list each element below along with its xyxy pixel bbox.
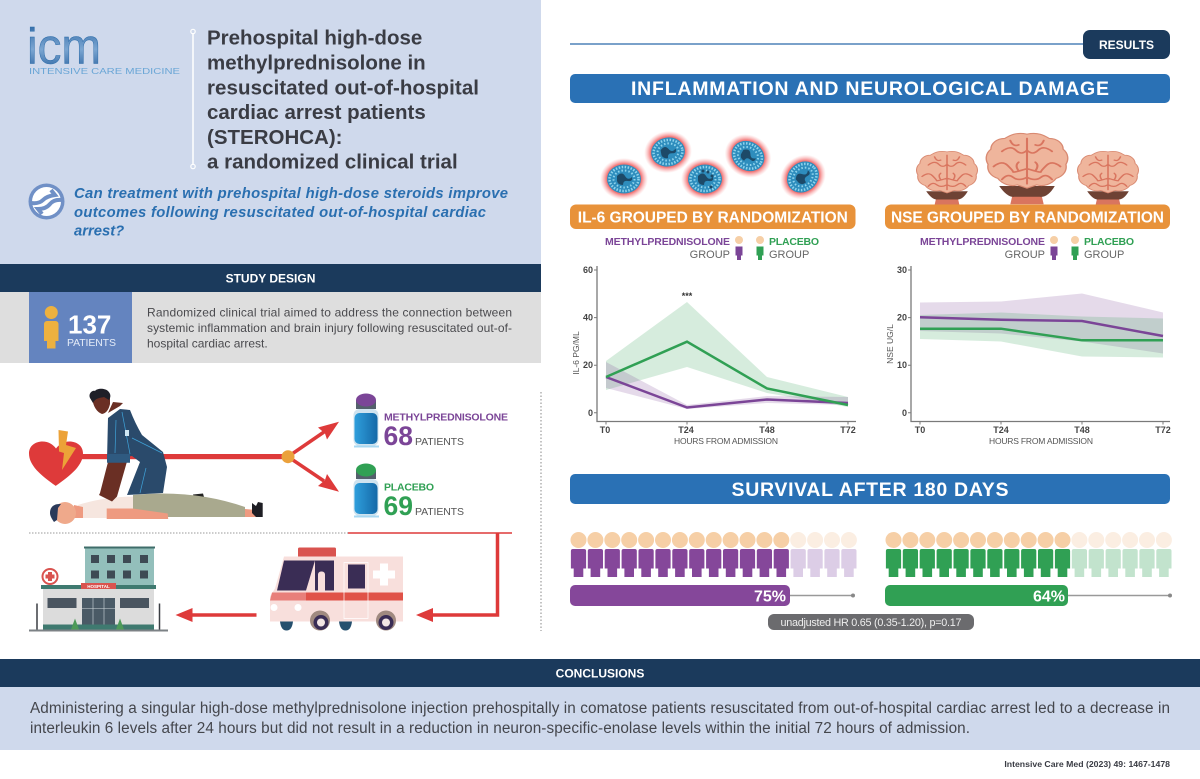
label: placebo 69 patients: PATIENTS — [415, 506, 464, 518]
logo: ICM Intensive Care Medicine: INTENSIVE CARE MEDICINE — [29, 66, 180, 76]
label: methylprednisolone 68 patients: 68 — [384, 421, 413, 451]
title — [207, 26, 479, 174]
legend: NSE chart: PLACEBO — [1084, 236, 1134, 248]
hazard ratio pill: unadjusted HR 0.65 (0.35-1.20), p=0.17 — [780, 617, 962, 629]
title: cardiac arrest patients — [207, 101, 426, 124]
label: placebo 69 patients: 69 — [384, 491, 413, 521]
heading: study design: STUDY DESIGN — [226, 272, 315, 286]
pictogram: methylprednisolone survivors — [570, 532, 857, 577]
icon: question arrows — [28, 184, 64, 220]
heading: study design — [0, 264, 541, 292]
pathway arrows — [80, 422, 339, 492]
panel: conclusions text: Administering a singular high-dose methylprednisolone injection prehospitally in comatose patients resuscitated from out-of-hospital cardiac arrest led to a decrease in — [30, 700, 1170, 717]
title: a randomized clinical trial — [207, 151, 458, 174]
icon: patient — [44, 306, 58, 348]
illustration: hospital — [29, 546, 168, 632]
chart: IL-6 line chart — [571, 265, 856, 446]
chart: NSE line chart: T48 — [1074, 425, 1090, 435]
illustration: patient lying down — [50, 494, 263, 524]
chart: NSE line chart: 20 — [897, 312, 907, 322]
bar: placebo 64% — [885, 585, 1172, 606]
legend: NSE chart: GROUP — [1005, 249, 1045, 261]
chart: IL-6 line chart: IL-6 PG/ML — [571, 331, 581, 375]
chart: IL-6 line chart: *** — [682, 291, 693, 301]
panel: study design: Randomized clinical trial aimed to address the connection between — [147, 306, 512, 320]
bar: methylprednisolone 75% — [570, 585, 855, 606]
panel: study design: PATIENTS — [67, 337, 116, 349]
research question: outcomes following resuscitated out-of-hospital cardiac — [74, 205, 487, 221]
citation: Intensive Care Med (2023) 49: 1467-1478 — [1004, 759, 1170, 769]
label: methylprednisolone 68 patients: METHYLPREDNISOLONE — [384, 412, 508, 424]
chart: NSE line chart: T0 — [915, 425, 925, 435]
results rule and badge — [570, 30, 1170, 59]
label: methylprednisolone 68 patients — [384, 412, 508, 451]
icon: placebo vial — [354, 464, 379, 516]
label: methylprednisolone 68 patients: PATIENTS — [415, 436, 464, 448]
panel: study design: 137 — [68, 310, 111, 340]
heading: inflammation and neurological damage — [570, 74, 1170, 103]
research question — [74, 186, 508, 240]
arrow: to hospital — [176, 608, 256, 622]
chart: IL-6 line chart: T0 — [600, 425, 610, 435]
label: placebo 69 patients — [384, 482, 464, 521]
title: Prehospital high-dose — [207, 26, 422, 50]
panel: study design — [0, 292, 541, 363]
label: placebo 69 patients: PLACEBO — [384, 482, 434, 494]
icons: inflamed cells — [600, 126, 835, 209]
chart: IL-6 line chart: T48 — [759, 425, 775, 435]
node: randomization — [282, 450, 294, 463]
chart: IL-6 line chart: 0 — [588, 408, 593, 418]
legend: IL-6 chart: METHYLPREDNISOLONE — [605, 236, 730, 248]
illustration: rescuer doing CPR — [90, 389, 167, 502]
title: resuscitated out-of-hospital — [207, 76, 479, 99]
bar: placebo 64%: 64% — [1033, 588, 1065, 606]
chart: NSE line chart: 0 — [902, 408, 907, 418]
arrow: to ambulance — [348, 533, 512, 622]
title divider — [191, 29, 195, 169]
heading: conclusions — [0, 659, 1200, 687]
legend: IL-6 chart: GROUP — [769, 249, 809, 261]
panel: study design: hospital cardiac arrest. — [147, 336, 268, 350]
icons: brains — [917, 133, 1138, 205]
logo: ICM Intensive Care Medicine: icm — [27, 18, 101, 74]
chart: NSE line chart: T24 — [993, 425, 1009, 435]
research question: arrest? — [74, 224, 124, 240]
chart: IL-6 line chart: 40 — [583, 312, 593, 322]
chart: NSE line chart: T72 — [1155, 425, 1171, 435]
legend: NSE chart — [920, 236, 1134, 261]
chart: IL-6 line chart: T24 — [678, 425, 694, 435]
logo: ICM Intensive Care Medicine — [27, 18, 180, 76]
heading: inflammation and neurological damage: INFLAMMATION AND NEUROLOGICAL DAMAGE — [631, 78, 1109, 100]
research question: Can treatment with prehospital high-dose steroids improve — [74, 186, 508, 202]
legend: IL-6 chart: PLACEBO — [769, 236, 819, 248]
chart: NSE line chart: 30 — [897, 265, 907, 275]
chart: NSE line chart: HOURS FROM ADMISSION — [989, 436, 1093, 446]
panel: header background — [0, 0, 541, 264]
panel: conclusions text — [0, 687, 1200, 750]
chart: NSE line chart — [885, 265, 1171, 446]
title: methylprednisolone in — [207, 52, 426, 74]
heading: conclusions: CONCLUSIONS — [556, 666, 644, 680]
chart: IL-6 line chart: 20 — [583, 360, 593, 370]
panel: study design: systemic inflammation and brain injury following resuscitated out-of- — [147, 321, 512, 335]
legend: IL-6 chart — [605, 236, 819, 261]
heading: survival after 180 days: SURVIVAL AFTER 180 DAYS — [732, 479, 1008, 501]
panel: conclusions text: interleukin 6 levels after 24 hours but did not result in a reduction in neuron-specific-enolase levels within the initial 72 hours of admission. — [30, 720, 970, 737]
heading: IL-6 — [570, 204, 856, 229]
legend: NSE chart: METHYLPREDNISOLONE — [920, 236, 1045, 248]
heading: survival after 180 days — [570, 474, 1170, 504]
hazard ratio pill — [768, 614, 974, 630]
results rule and badge: RESULTS — [1099, 38, 1154, 52]
chart: IL-6 line chart: T72 — [840, 425, 856, 435]
legend: IL-6 chart: GROUP — [690, 249, 730, 261]
title: (STEROHCA): — [207, 126, 343, 149]
chart: IL-6 line chart: 60 — [583, 265, 593, 275]
heading: NSE: NSE GROUPED BY RANDOMIZATION — [891, 210, 1164, 226]
heading: IL-6: IL-6 GROUPED BY RANDOMIZATION — [578, 210, 848, 226]
bar: methylprednisolone 75%: 75% — [754, 588, 786, 606]
legend: NSE chart: GROUP — [1084, 249, 1124, 261]
chart: NSE line chart: NSE UG/L — [885, 324, 895, 364]
pictogram: placebo survivors — [886, 532, 1172, 577]
chart: NSE line chart: 10 — [897, 360, 907, 370]
icon: methylprednisolone vial — [354, 394, 379, 446]
chart: IL-6 line chart: HOURS FROM ADMISSION — [674, 436, 778, 446]
icon: heart with bolt — [29, 430, 83, 486]
illustration: ambulance — [270, 548, 403, 630]
heading: NSE — [885, 204, 1170, 229]
illustration: hospital: HOSPITAL — [87, 584, 110, 589]
